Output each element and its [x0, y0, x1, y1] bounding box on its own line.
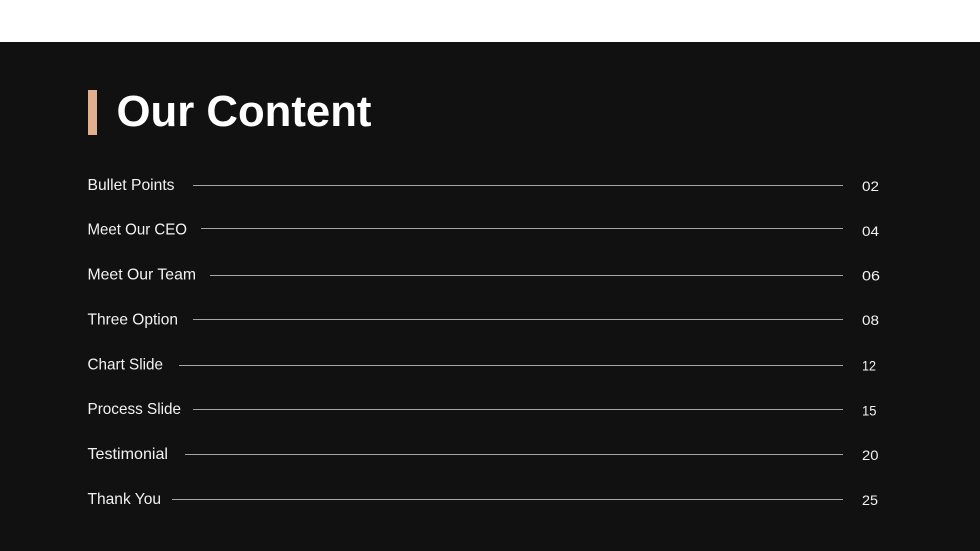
contents row: Meet Our CEO: Meet Our CEO — [88, 222, 187, 238]
contents row: Three Option: Three Option — [88, 312, 178, 328]
contents row: Meet Our CEO — [88, 222, 879, 239]
contents row: Process Slide — [88, 401, 877, 418]
contents row: Process Slide: 15 — [862, 402, 877, 418]
contents row: Meet Our Team: Meet Our Team — [88, 266, 196, 284]
contents row: Thank You: Thank You — [88, 491, 161, 508]
contents row: Chart Slide: Chart Slide — [88, 356, 163, 374]
contents row: Meet Our Team — [88, 266, 880, 284]
contents row: Process Slide: Process Slide — [88, 401, 181, 418]
contents row: Thank You: 25 — [862, 492, 878, 508]
contents row: Thank You — [88, 491, 878, 508]
contents row: Three Option: 08 — [862, 312, 879, 328]
contents row: Bullet Points: 02 — [862, 178, 879, 194]
contents row: Meet Our CEO: 04 — [862, 223, 879, 239]
contents row: Chart Slide — [88, 356, 876, 374]
contents row: Bullet Points: Bullet Points — [88, 177, 174, 194]
contents row: Three Option — [88, 312, 879, 328]
icon: accent bar — [88, 90, 97, 135]
contents row: Testimonial — [88, 446, 879, 463]
contents row: Testimonial: 20 — [862, 447, 879, 463]
contents row: Testimonial: Testimonial — [88, 446, 168, 463]
contents row: Meet Our Team: 06 — [862, 268, 880, 284]
contents row: Chart Slide: 12 — [862, 358, 876, 374]
contents row: Bullet Points — [88, 177, 879, 194]
title: Our Content — [116, 87, 372, 136]
